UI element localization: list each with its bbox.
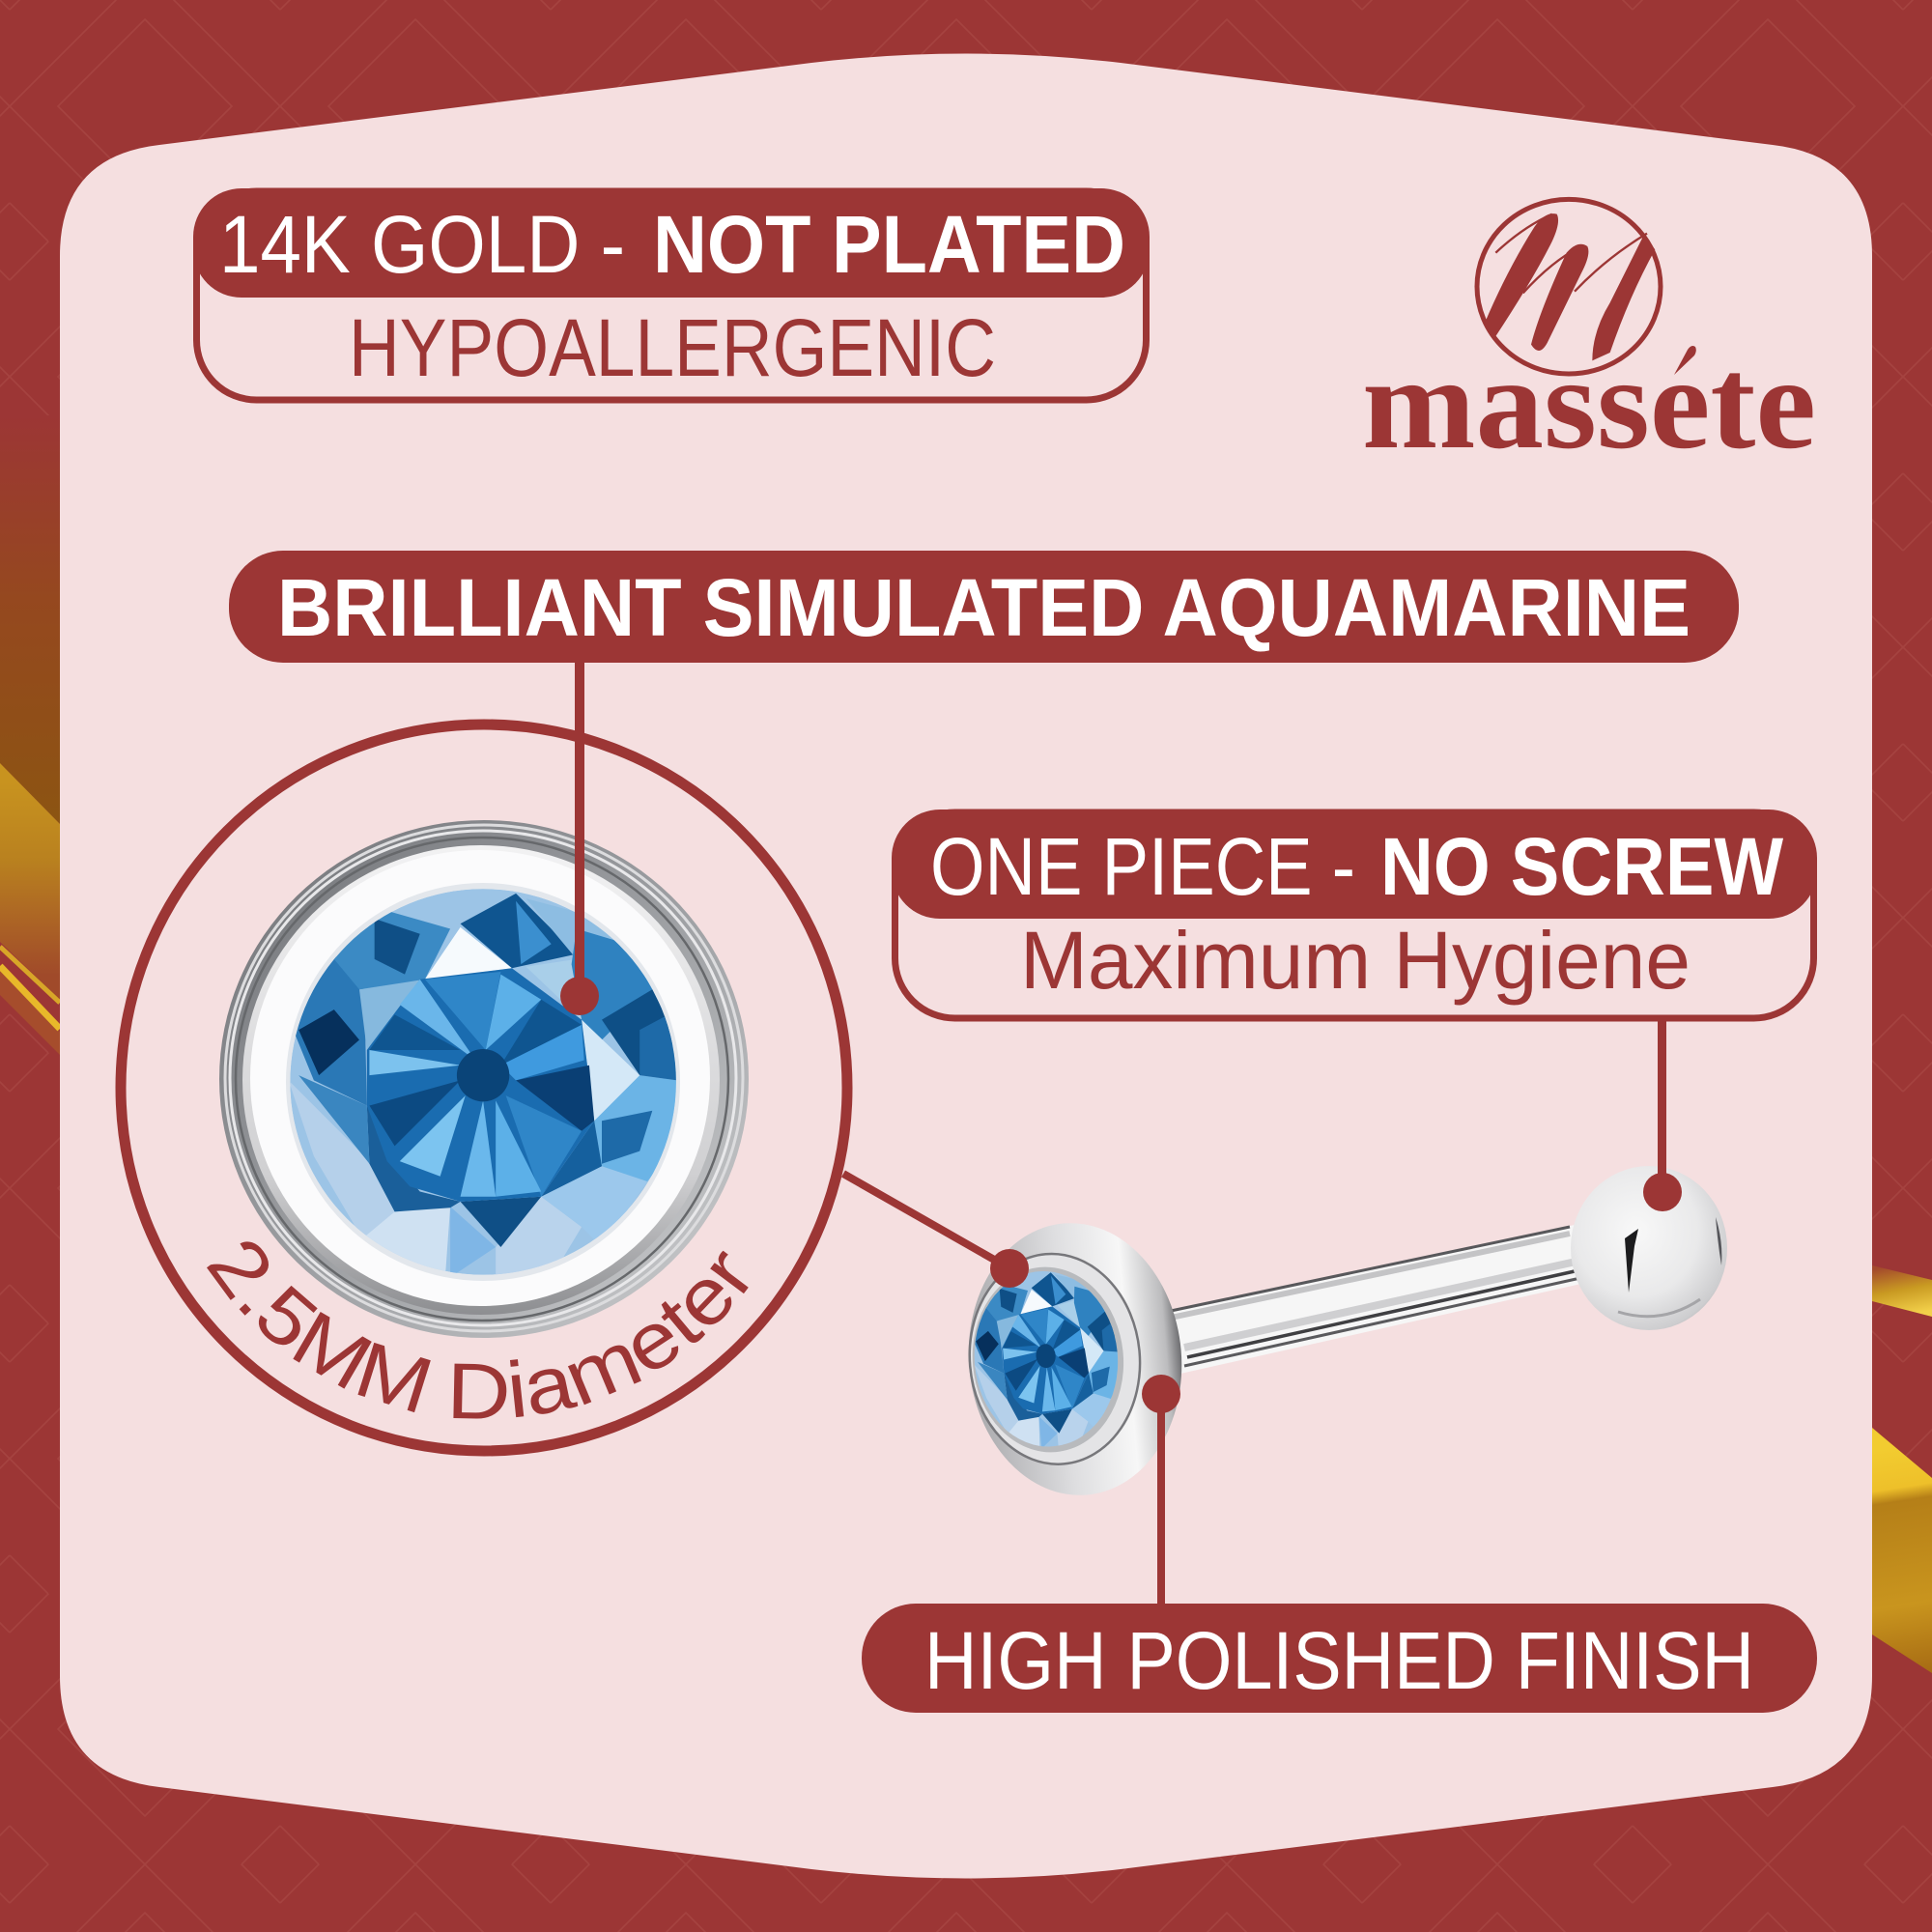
gold swoosh right <box>1872 1265 1932 1673</box>
badge: high polished finish: HIGH POLISHED FINISH <box>924 1615 1754 1706</box>
pin shaft <box>1164 1225 1594 1374</box>
badge: brilliant simulated aquamarine: BRILLIANT SIMULATED AQUAMARINE <box>277 562 1690 653</box>
heading: 14K gold not plated <box>219 199 1125 290</box>
icon: bezel close-up <box>219 820 749 1338</box>
heading: one piece no screw: ONE PIECE - <box>930 821 1355 912</box>
logo accent <box>1669 338 1710 380</box>
logo emblem <box>1477 199 1661 374</box>
icon: nose stud pin <box>957 1166 1727 1504</box>
logo wordmark: masséte <box>1362 331 1816 476</box>
magnified circle: stone detail <box>116 719 852 1457</box>
pin bezel disc <box>957 1214 1193 1504</box>
badge: one piece no screw <box>892 810 1817 1018</box>
heading: one piece no screw <box>930 821 1784 912</box>
connector: one piece to ball <box>1643 1018 1682 1211</box>
heading: one piece no screw: NO SCREW <box>1380 821 1784 912</box>
curved label: 2.5MM diameter: 2.5MM Diameter <box>207 1241 749 1418</box>
icon: aquamarine stone <box>289 889 677 1277</box>
pin ball end <box>1571 1166 1727 1330</box>
logo: massete <box>1362 199 1816 476</box>
connector: magnifier to pin <box>843 1174 1029 1288</box>
icon: small stone <box>967 1265 1125 1454</box>
heading: 14K gold not plated: NOT PLATED <box>653 199 1125 290</box>
badge: 14K gold <box>193 188 1150 400</box>
heading: 14K gold not plated: 14K GOLD - <box>219 199 625 290</box>
text: maximum hygiene: Maximum Hygiene <box>1020 915 1690 1006</box>
gold swoosh left <box>0 415 60 1055</box>
connector: polish to bezel <box>1142 1375 1180 1605</box>
connector: stone callout <box>560 663 599 1015</box>
text: hypoallergenic: HYPOALLERGENIC <box>349 302 996 393</box>
